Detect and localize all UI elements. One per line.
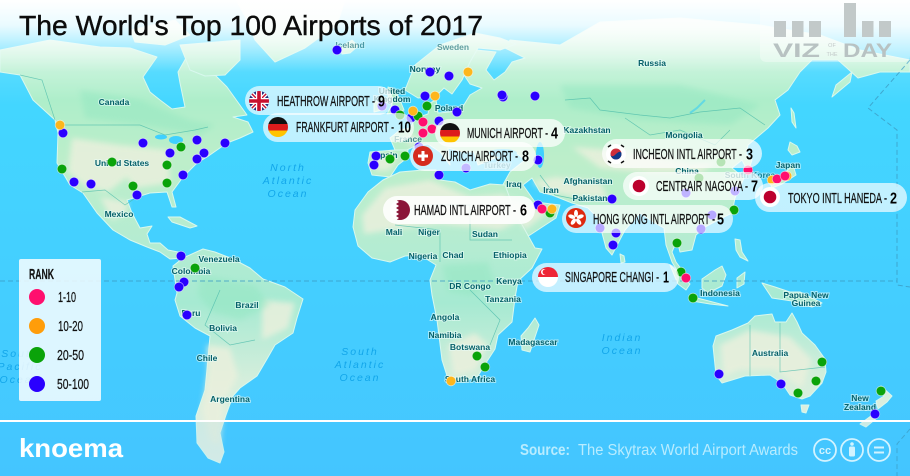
country labels: Norway bbox=[410, 64, 441, 74]
flag: Germany bbox=[268, 117, 288, 138]
flag: Germany bbox=[440, 123, 460, 144]
callout: Hamad Intl Airport: HAMAD INTL AIRPORT - bbox=[414, 202, 516, 219]
callout: Centrair Nagoya: CENTRAIR NAGOYA - bbox=[656, 178, 748, 195]
country labels: Kazakhstan bbox=[563, 125, 611, 135]
legend item 50-100: 50-100 bbox=[57, 376, 89, 393]
country borders bbox=[20, 75, 825, 376]
Viz of the Day logo: OF bbox=[828, 43, 836, 49]
callout: Frankfurt Airport: FRANKFURT AIRPORT - bbox=[296, 119, 394, 136]
legend item 1-10: 1-10 bbox=[58, 289, 76, 306]
ocean labels: Ocean bbox=[268, 188, 308, 200]
country labels: Spain bbox=[374, 150, 398, 160]
callout: Munich Airport: MUNICH AIRPORT - bbox=[467, 125, 548, 142]
country labels: China bbox=[675, 166, 699, 176]
country labels: DR Congo bbox=[449, 281, 491, 291]
arid and temperate land tint bbox=[68, 134, 812, 445]
legend bbox=[19, 259, 101, 401]
country labels: Venezuela bbox=[198, 254, 240, 264]
logo backdrop fade bbox=[760, 0, 910, 62]
source note: The Skytrax World Airport Awards bbox=[578, 442, 798, 459]
callout: Incheon Intl Airport bbox=[602, 139, 762, 168]
airport dots bbox=[55, 45, 886, 419]
country labels: Chile bbox=[197, 353, 218, 363]
country labels: Iran bbox=[543, 185, 559, 195]
ocean labels: Ocean bbox=[340, 372, 380, 384]
rank 10-20 dots bbox=[55, 67, 792, 386]
flag: United Kingdom bbox=[249, 91, 269, 111]
callout: Centrair Nagoya: 7 bbox=[751, 178, 758, 196]
flag: Switzerland bbox=[413, 146, 433, 166]
callout: Frankfurt Airport: 10 bbox=[398, 120, 411, 136]
legend item 20-50 bbox=[29, 347, 84, 364]
country labels: United bbox=[379, 86, 405, 96]
country labels: Ethiopia bbox=[493, 250, 527, 260]
country labels: Pakistan bbox=[573, 193, 607, 203]
callout: Hong Kong Intl Airport: HONG KONG INTL AIRPORT - bbox=[593, 211, 715, 228]
country labels: Indonesia bbox=[700, 288, 740, 298]
callout: Zurich Airport: ZURICH AIRPORT - bbox=[441, 148, 518, 165]
ocean labels: Indian bbox=[602, 332, 642, 344]
callout: Frankfurt Airport bbox=[263, 113, 414, 142]
country labels: Botswana bbox=[450, 342, 490, 352]
legend item 10-20: 10-20 bbox=[58, 318, 83, 335]
country labels: Bolivia bbox=[209, 323, 237, 333]
callout: Zurich Airport bbox=[410, 142, 536, 171]
green forest tint bbox=[80, 85, 760, 320]
flag: Hong Kong bbox=[566, 208, 586, 228]
footer divider bbox=[0, 420, 910, 422]
callout: Heathrow Airport bbox=[245, 86, 393, 115]
icon: no derivatives bbox=[868, 439, 890, 461]
country labels: Mexico bbox=[105, 209, 133, 219]
country labels: Kingdom bbox=[374, 94, 411, 104]
country labels: Kenya bbox=[496, 276, 522, 286]
country labels: Guinea bbox=[792, 298, 821, 308]
legend item 1-10 bbox=[29, 289, 76, 306]
callout: Incheon Intl Airport: INCHEON INTL AIRPORT - bbox=[633, 146, 742, 163]
legend item 10-20 bbox=[29, 318, 83, 335]
country labels bbox=[95, 40, 876, 412]
top white fade bbox=[0, 0, 910, 72]
ocean labels: South bbox=[1, 348, 39, 360]
callout: Tokyo Intl Haneda bbox=[755, 183, 907, 212]
country labels: Russia bbox=[638, 58, 666, 68]
flag: Singapore bbox=[538, 267, 558, 287]
country labels: Poland bbox=[435, 103, 463, 113]
country labels: Sudan bbox=[472, 229, 498, 239]
country labels: Madagascar bbox=[508, 337, 558, 347]
ocean labels: Ocean bbox=[0, 374, 40, 386]
ocean labels: South bbox=[341, 346, 379, 358]
Creative Commons icons bbox=[814, 439, 890, 461]
country labels: Colombia bbox=[172, 266, 211, 276]
country labels: Papua New bbox=[783, 290, 829, 300]
inland seas and lakes bbox=[155, 100, 705, 168]
title: The World's Top 100 Airports of 2017 bbox=[19, 10, 483, 41]
country labels: Chad bbox=[442, 250, 464, 260]
country labels: Brazil bbox=[235, 300, 259, 310]
flag: Qatar bbox=[396, 200, 410, 220]
country labels: Angola bbox=[431, 312, 460, 322]
rank 20-50 dots bbox=[57, 101, 886, 398]
rank 50-100 dots bbox=[58, 45, 880, 419]
callout: Tokyo Intl Haneda: 2 bbox=[890, 190, 897, 208]
icon: attribution bbox=[841, 439, 863, 461]
callout: Hamad Intl Airport: 6 bbox=[520, 202, 527, 220]
callout: Munich Airport: 4 bbox=[551, 126, 558, 142]
callout: Munich Airport bbox=[435, 119, 565, 147]
callout: Hamad Intl Airport bbox=[383, 196, 535, 224]
callout: Hong Kong Intl Airport: 5 bbox=[717, 212, 724, 228]
country labels: South Africa bbox=[445, 374, 495, 384]
callout: Hong Kong Intl Airport bbox=[562, 205, 733, 233]
country labels: Zealand bbox=[844, 402, 876, 412]
country labels: Tanzania bbox=[485, 294, 521, 304]
country labels: Argentina bbox=[210, 394, 250, 404]
country labels: Sweden bbox=[437, 42, 469, 52]
callout: Incheon Intl Airport: 3 bbox=[746, 146, 753, 164]
callout: Singapore Changi bbox=[532, 263, 679, 292]
callout: Heathrow Airport: 9 bbox=[378, 94, 385, 110]
flag: South Korea bbox=[606, 144, 626, 164]
ocean labels: Atlantic bbox=[334, 359, 385, 371]
Viz of the Day logo bbox=[773, 3, 892, 62]
ocean labels: Ocean bbox=[602, 345, 642, 357]
footer band tint bbox=[0, 422, 910, 476]
icon: cc: cc bbox=[819, 445, 831, 457]
country labels: Niger bbox=[418, 227, 441, 237]
country labels: New bbox=[851, 393, 869, 403]
country labels: France bbox=[394, 134, 422, 144]
country labels: Japan bbox=[776, 160, 800, 170]
ocean labels bbox=[0, 162, 642, 386]
callout: Singapore Changi: SINGAPORE CHANGI - bbox=[565, 269, 659, 286]
country labels: Turkey bbox=[483, 160, 511, 170]
callout: Singapore Changi: 1 bbox=[663, 270, 669, 286]
ocean labels: North bbox=[270, 162, 306, 174]
flag: Japan bbox=[760, 187, 780, 207]
Viz of the Day logo: DAY bbox=[843, 41, 892, 62]
country labels: Australia bbox=[752, 348, 788, 358]
country labels: United States bbox=[95, 158, 149, 168]
country labels: South Korea bbox=[725, 170, 776, 180]
Viz of the Day logo: VIZ bbox=[773, 41, 821, 62]
Knoema logo: knoema bbox=[19, 433, 124, 463]
legend heading: RANK bbox=[29, 266, 54, 283]
country labels: Canada bbox=[99, 97, 130, 107]
flag: Japan bbox=[629, 176, 649, 196]
country labels: Namibia bbox=[428, 330, 462, 340]
callout: Zurich Airport: 8 bbox=[522, 148, 529, 166]
country labels: Nigeria bbox=[409, 251, 438, 261]
ocean labels: Atlantic bbox=[262, 175, 313, 187]
source note: Source: bbox=[520, 442, 570, 459]
legend item 50-100 bbox=[29, 376, 89, 393]
country labels: Iraq bbox=[506, 179, 522, 189]
callout: Centrair Nagoya bbox=[623, 172, 763, 200]
country labels: Peru bbox=[182, 308, 200, 318]
callout: Heathrow Airport: HEATHROW AIRPORT - bbox=[277, 93, 375, 110]
rank 1-10 dots bbox=[418, 117, 790, 283]
country labels: Mongolia bbox=[665, 130, 703, 140]
legend item 20-50: 20-50 bbox=[57, 347, 84, 364]
Viz of the Day logo: THE bbox=[826, 52, 838, 58]
country labels: Afghanistan bbox=[563, 176, 613, 186]
country labels: Mali bbox=[386, 227, 402, 237]
country labels: Iceland bbox=[335, 40, 365, 50]
